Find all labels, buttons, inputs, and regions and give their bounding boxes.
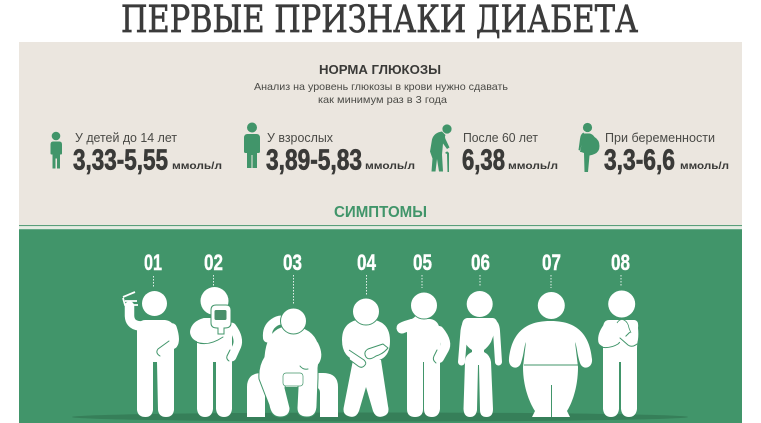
icon: glucose meter bbox=[211, 305, 231, 334]
number 07: 07 bbox=[542, 250, 561, 275]
icon: child bbox=[50, 132, 62, 168]
unit: over 60: ммоль/л bbox=[508, 161, 558, 172]
number 01: 01 bbox=[144, 250, 162, 275]
bench bbox=[247, 373, 338, 417]
number 03: 03 bbox=[283, 250, 302, 275]
group: adults bbox=[244, 122, 415, 176]
body bbox=[259, 327, 320, 417]
number 08: 08 bbox=[611, 250, 630, 275]
unit: adults: ммоль/л bbox=[365, 161, 415, 172]
symptom 03 bbox=[247, 250, 338, 417]
panel: symptoms bbox=[19, 229, 742, 423]
icon: adult bbox=[244, 122, 260, 168]
text: analysis note bbox=[254, 81, 509, 106]
legs bbox=[344, 360, 388, 417]
ground shadow bbox=[72, 412, 688, 422]
text: analysis note: Анализ на уровень глюкозы в крови нужно сдавать bbox=[254, 81, 509, 93]
symptom 06 bbox=[462, 250, 498, 417]
symptom 05 bbox=[402, 250, 445, 417]
number 04: 04 bbox=[357, 250, 377, 275]
label: over 60: После 60 лет bbox=[463, 131, 538, 145]
value: pregnancy: 3,3-6,6 bbox=[604, 144, 675, 176]
arm holding meter bbox=[197, 325, 220, 336]
value: over 60: 6,38 bbox=[462, 144, 505, 176]
icon: elderly person with cane bbox=[430, 124, 452, 172]
label: pregnancy: При беременности bbox=[605, 131, 715, 145]
panel: glucose norm bbox=[19, 42, 742, 229]
icon: pregnant woman bbox=[578, 123, 600, 172]
icon: glass bbox=[123, 292, 138, 305]
number 05: 05 bbox=[413, 250, 432, 275]
group: over 60 bbox=[430, 124, 558, 176]
text: analysis note: как минимум раз в 3 года bbox=[318, 94, 447, 106]
symptom 01 bbox=[123, 250, 174, 417]
group: children bbox=[50, 131, 222, 176]
number 02: 02 bbox=[204, 250, 223, 275]
heading: glucose norm: НОРМА ГЛЮКОЗЫ bbox=[319, 62, 441, 77]
value: children: 3,33-5,55 bbox=[73, 144, 168, 176]
symptom 08 bbox=[600, 250, 638, 417]
number 06: 06 bbox=[471, 250, 490, 275]
label: adults: У взрослых bbox=[267, 131, 334, 145]
heading: symptoms: СИМПТОМЫ bbox=[334, 204, 427, 221]
unit: children: ммоль/л bbox=[172, 161, 222, 172]
unit: pregnancy: ммоль/л bbox=[680, 161, 729, 172]
symptom 04 bbox=[342, 250, 390, 417]
symptom 02 bbox=[196, 250, 238, 417]
value: adults: 3,89-5,83 bbox=[266, 144, 362, 176]
group: pregnancy bbox=[578, 123, 729, 176]
symptom 07 bbox=[509, 250, 592, 417]
label: children: У детей до 14 лет bbox=[75, 131, 177, 145]
